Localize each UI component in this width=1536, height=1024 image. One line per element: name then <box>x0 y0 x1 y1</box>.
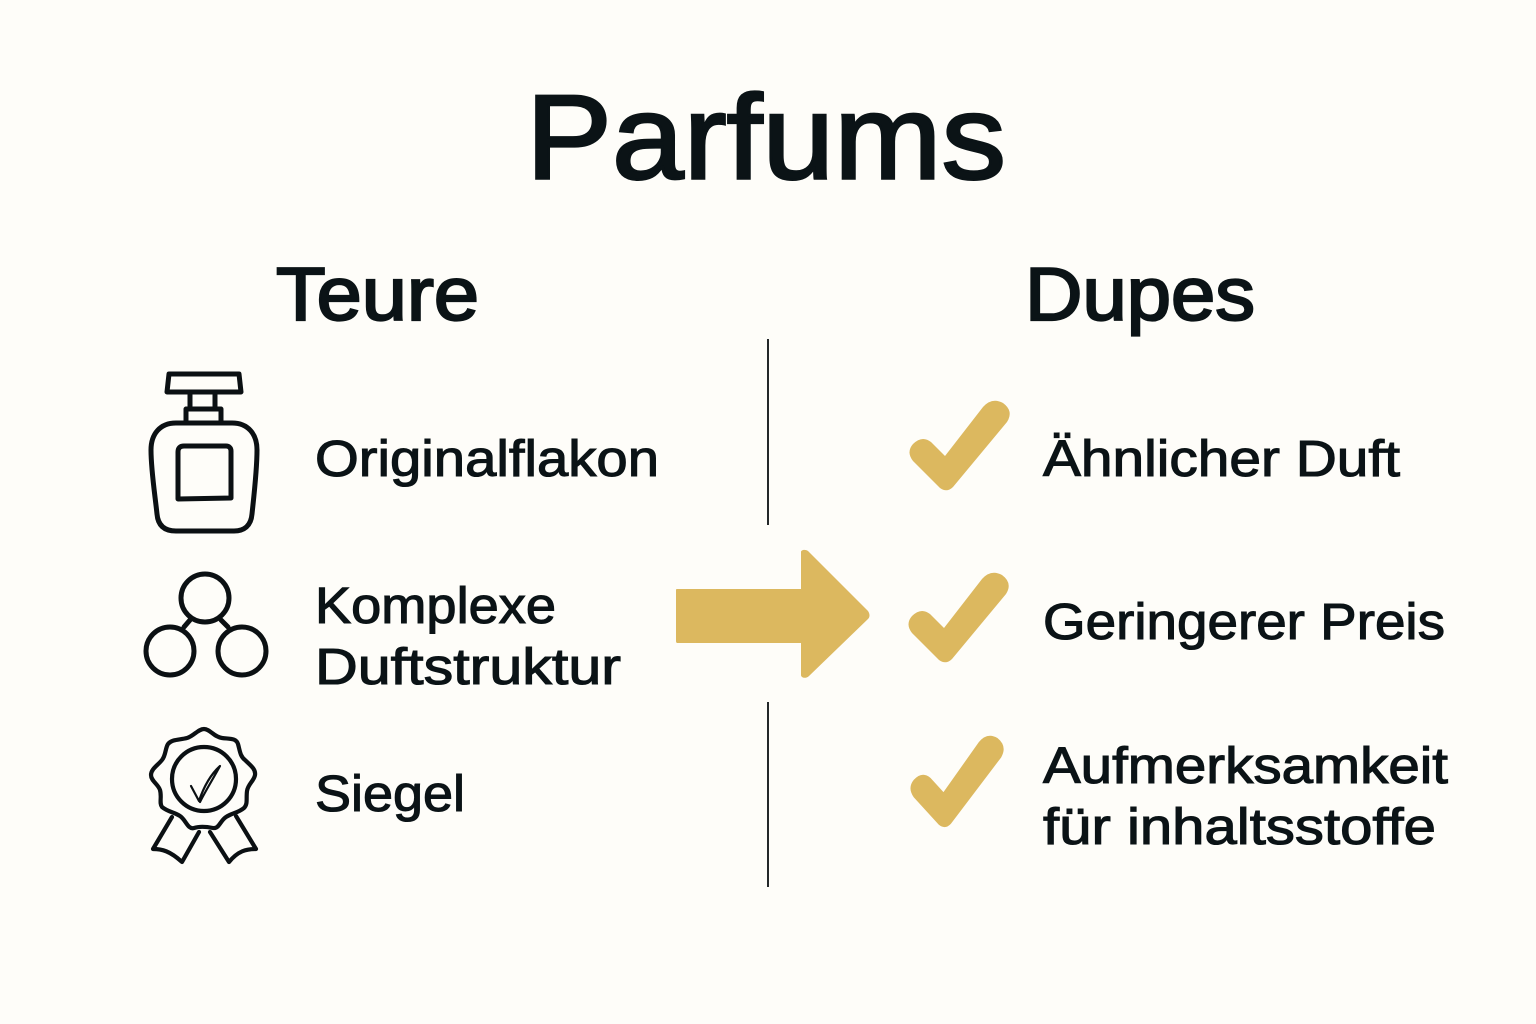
icon: check 1 <box>910 401 1010 490</box>
text: Aufmerksamkeit für inhaltsstoffe: für inhaltsstoffe <box>1043 798 1436 855</box>
text: Komplexe Duftstruktur: Komplexe <box>315 577 556 634</box>
text: Komplexe Duftstruktur: Duftstruktur <box>315 638 621 695</box>
divider: upper <box>767 339 769 525</box>
text: Originalflakon: Originalflakon <box>315 430 659 487</box>
divider: lower <box>767 702 769 887</box>
heading: Teure: Teure <box>276 252 479 336</box>
arrow <box>676 550 870 678</box>
text: Aufmerksamkeit für inhaltsstoffe: Aufmerksamkeit <box>1043 737 1448 794</box>
text: Aufmerksamkeit für inhaltsstoffe <box>1043 737 1448 855</box>
text: Komplexe Duftstruktur <box>315 577 621 695</box>
icon: check 3 <box>910 736 1004 827</box>
heading: Dupes: Dupes <box>1025 252 1255 336</box>
icon: perfume bottle <box>151 374 257 531</box>
text: Geringerer Preis: Geringerer Preis <box>1043 593 1445 650</box>
icon: seal <box>151 729 256 862</box>
text: Ähnlicher Duft: Ähnlicher Duft <box>1043 430 1400 487</box>
title: Parfums <box>526 70 1006 204</box>
text: Siegel: Siegel <box>315 765 465 822</box>
icon: fragrance structure <box>146 574 266 675</box>
icon: check 2 <box>908 573 1009 662</box>
